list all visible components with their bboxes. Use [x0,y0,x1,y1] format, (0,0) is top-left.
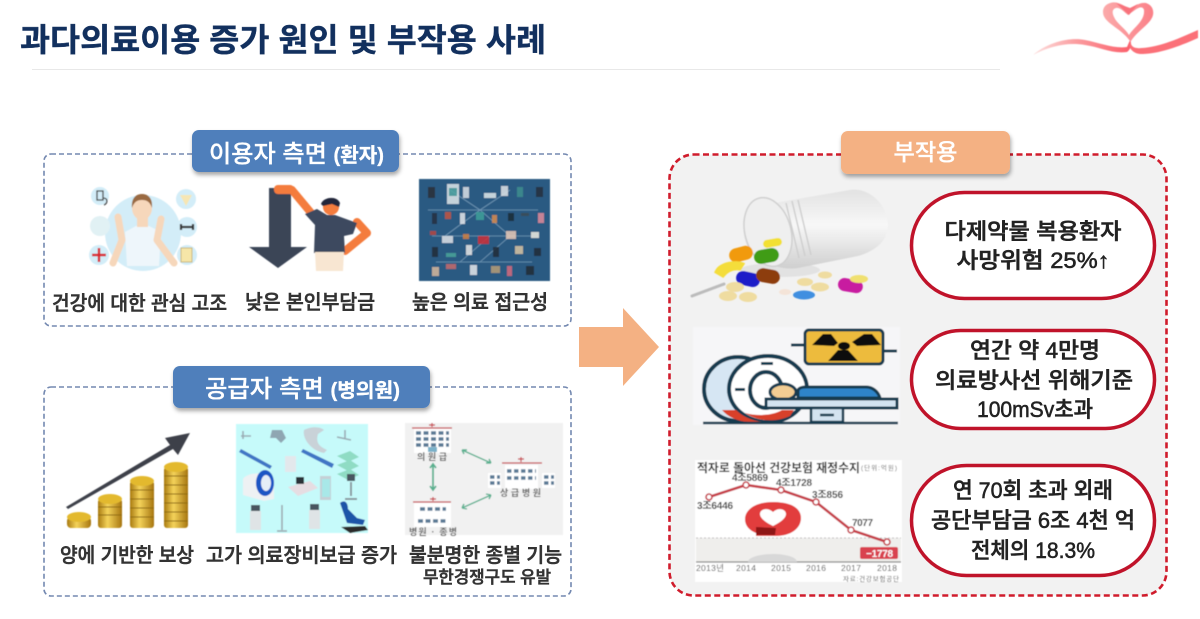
chart: health insurance fiscal balance: 4조1728 [776,477,812,489]
label: unlimited competition: 무한경쟁구도 유발 [423,568,551,587]
heading: side effects: 부작용 [894,139,958,165]
chart: health insurance fiscal balance: 3조856 [812,489,843,501]
heading: user side: 이용자 측면 (환자) [209,141,384,168]
chart: health insurance fiscal balance: 2014 [736,563,756,573]
chart: health insurance fiscal balance: −1778 [866,549,893,560]
panel: user side [44,130,571,326]
callout: medical radiation: 의료방사선 위해기준 [935,368,1133,393]
chart: health insurance fiscal balance: 7077 [852,518,873,529]
chart: health insurance fiscal balance: 3조6446 [697,500,733,512]
chart: health insurance fiscal balance [695,460,902,583]
icon: MRI and radiation sign [693,327,900,425]
heading: side effects [841,131,1010,174]
icon: spilled pill bottle [692,190,888,302]
chart: health insurance fiscal balance: 2017 [841,563,861,573]
icon: hospital competition diagram [405,423,563,537]
label: unclear function by type: 불분명한 종별 기능 [409,544,562,567]
heading: user side [192,130,399,172]
icon: hospital competition diagram: 상급병원 [500,487,541,498]
label: expensive equipment spread: 고가 의료장비보급 증가 [206,544,397,567]
callout: medical radiation: 연간 약 4만명 [970,338,1100,363]
chart: health insurance fiscal balance: 2013년 [696,563,724,573]
label: volume-based reward: 양에 기반한 보상 [60,544,194,567]
chart: health insurance fiscal balance: 자료:건강보험공단 [843,574,899,583]
chart: health insurance fiscal balance: 2018 [877,563,897,573]
icon: rising coin stacks [66,433,190,528]
chart: health insurance fiscal balance: 적자로 돌아선 건강보험 재정수지 [697,460,860,475]
chart: health insurance fiscal balance: (단위:억원) [861,463,897,472]
callout: polypharmacy: 사망위험 25%↑ [956,248,1110,273]
chart: health insurance fiscal balance: 2015 [771,563,791,573]
label: heightened interest in health: 건강에 대한 관심 고조 [52,292,227,315]
panel: provider side [44,366,571,596]
label: low copayment: 낮은 본인부담금 [245,291,375,314]
heading: provider side [173,366,430,408]
heading: provider side: 공급자 측면 (병의원) [205,376,400,403]
callout: medical radiation: 100mSv초과 [977,397,1093,422]
callout: excessive outpatient visits: 전체의 18.3% [971,538,1095,563]
icon: down arrow and man [249,185,367,271]
arrow: causes to side effects [579,308,659,386]
chart: health insurance fiscal balance: 4조5869 [732,472,768,484]
callout: polypharmacy [912,192,1154,298]
icon: hospital network illustration [419,179,550,281]
callout: excessive outpatient visits: 공단부담금 6조 4천 억 [931,508,1135,533]
callout: excessive outpatient visits [912,466,1154,576]
icon: medical equipment illustration [236,424,368,533]
icon: hospital competition diagram: 의원급 [417,451,447,462]
callout: medical radiation [912,330,1154,428]
icon: heart ribbon [1033,2,1198,55]
callout: excessive outpatient visits: 연 70회 초과 외래 [953,478,1113,503]
icon: hospital competition diagram: 병원 · 종병 [409,526,457,537]
title: 과다의료이용 증가 원인 및 부작용 사례 [20,22,546,58]
callout: polypharmacy: 다제약물 복용환자 [944,219,1122,244]
chart: health insurance fiscal balance: 2016 [806,563,826,573]
icon: health-conscious person [89,187,197,271]
panel: side effects [670,131,1166,596]
label: high accessibility: 높은 의료 접근성 [412,291,548,314]
